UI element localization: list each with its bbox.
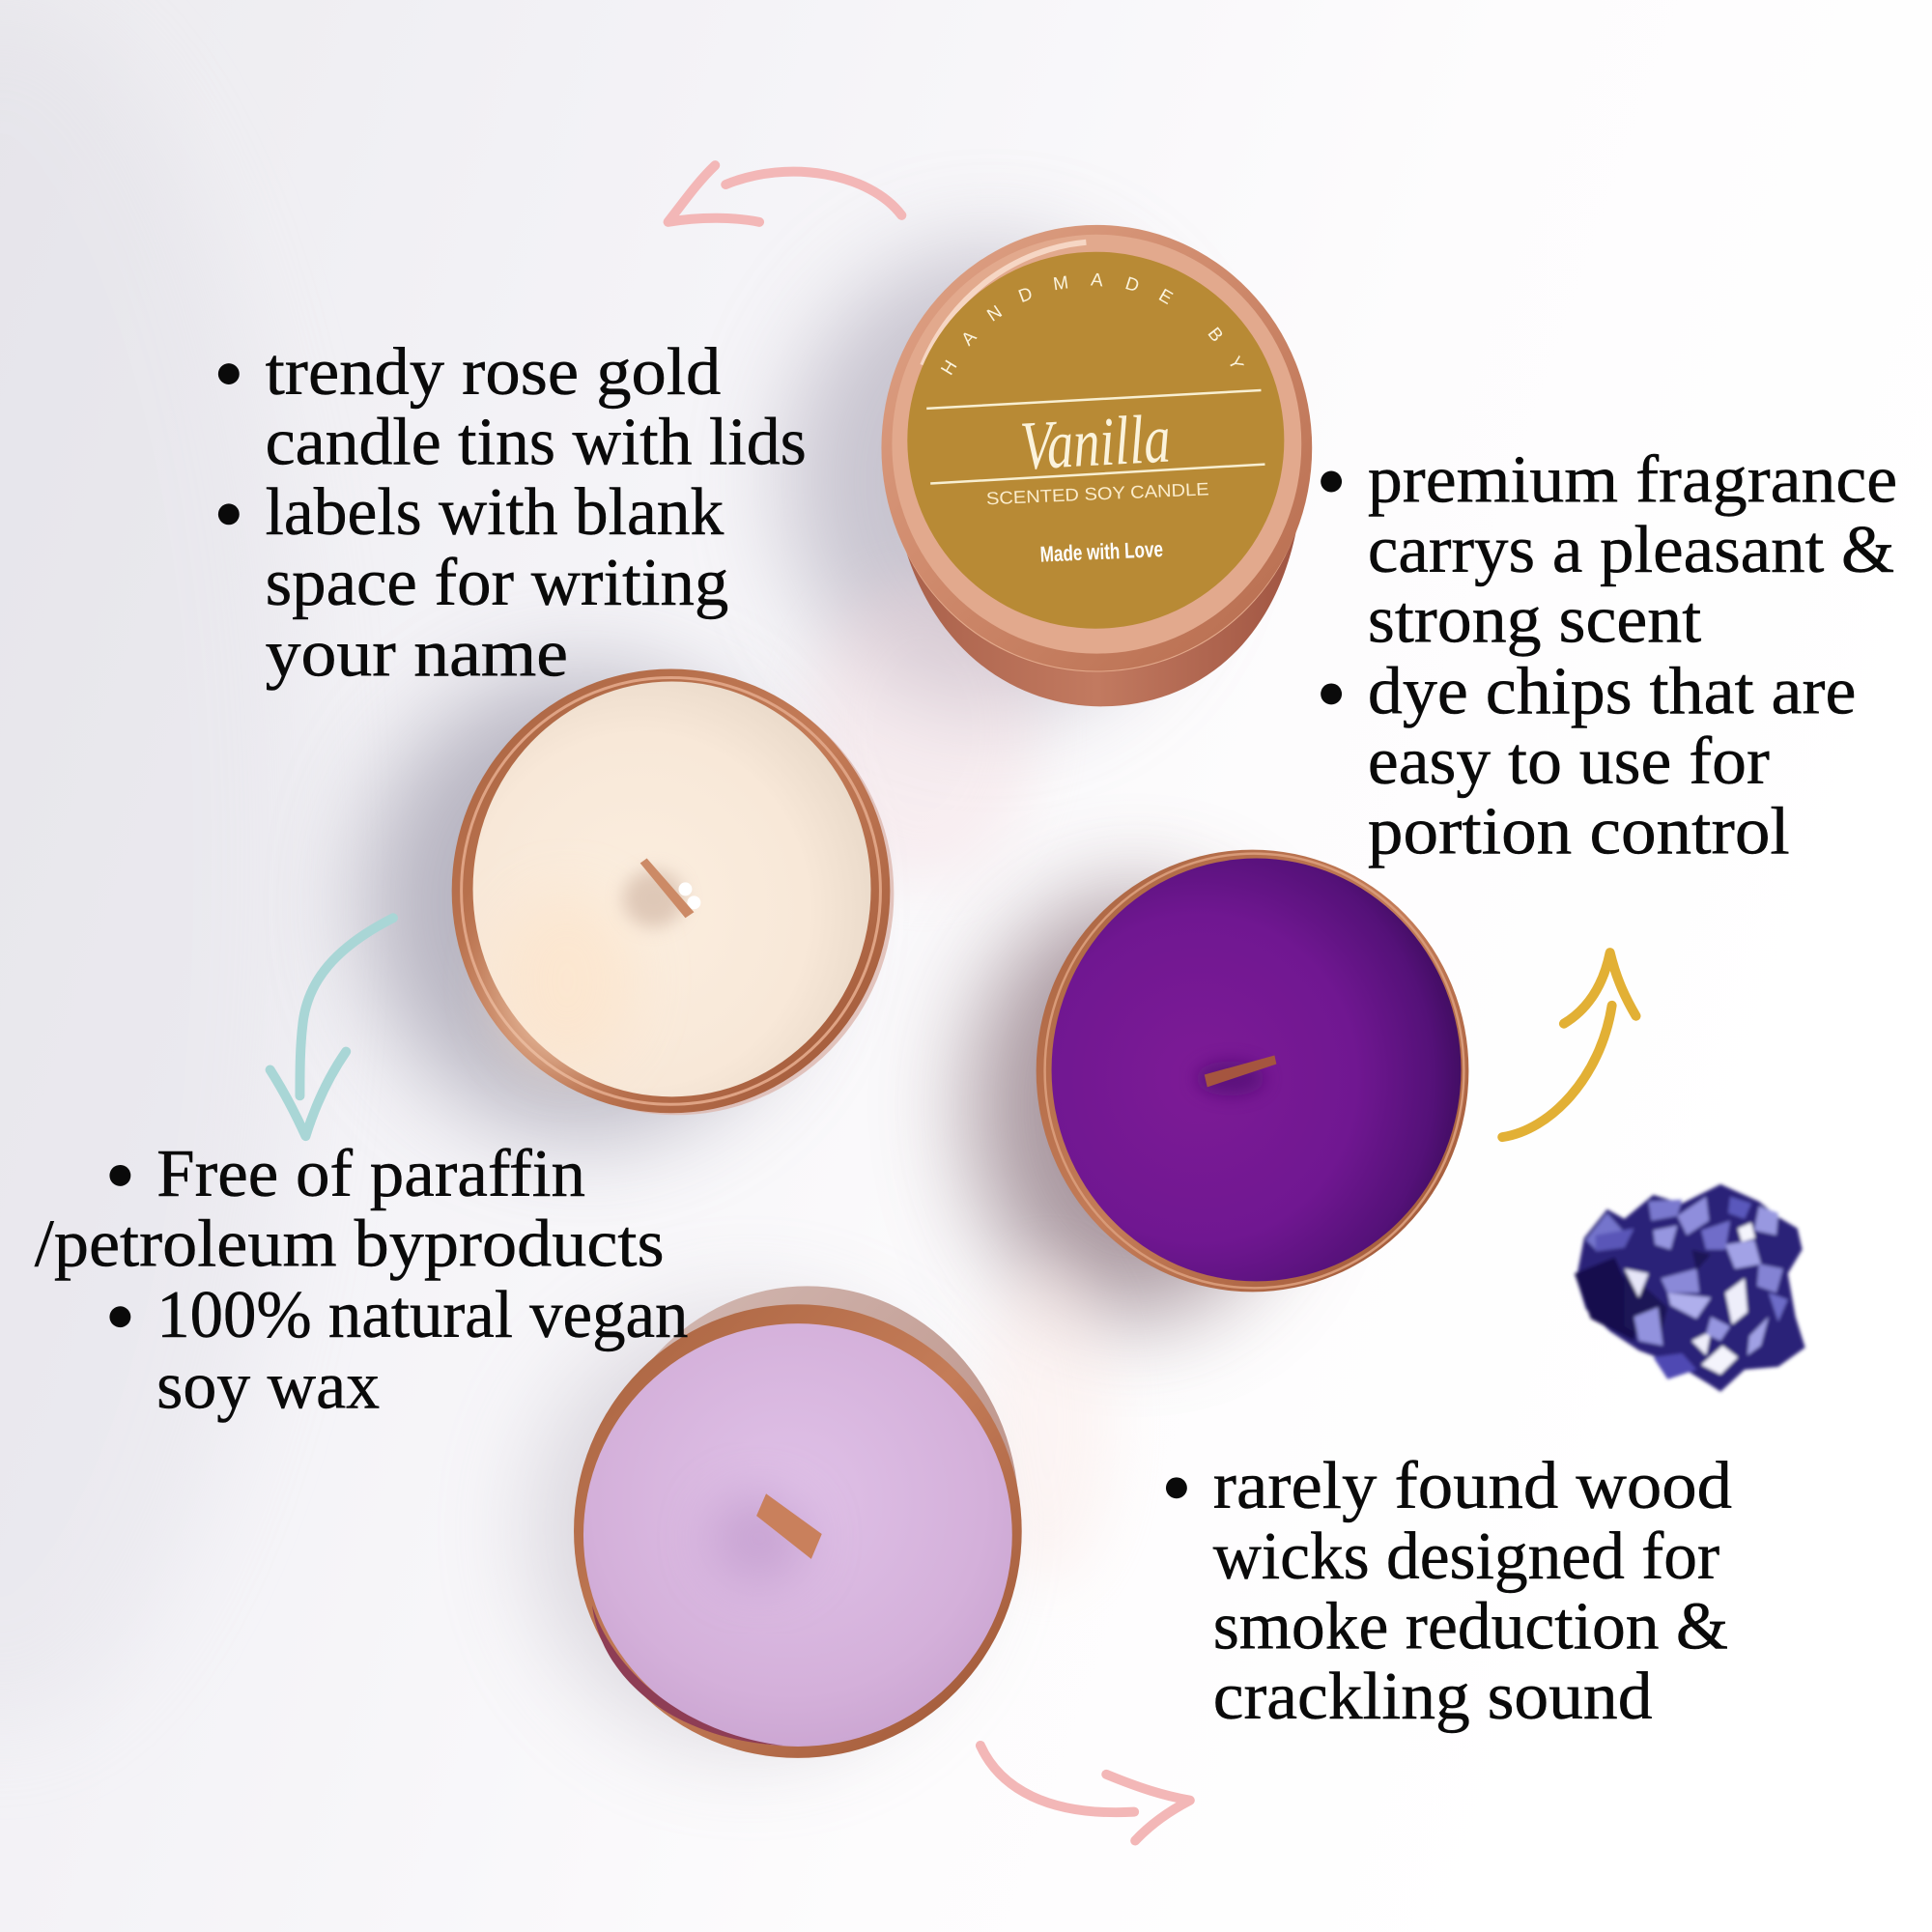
text block: fragrance and dye: premium fragrance <box>1368 442 1897 517</box>
text block: fragrance and dye: strong scent <box>1368 583 1701 658</box>
lid rim <box>881 225 1312 671</box>
text block: rose gold tins: your name <box>266 617 568 692</box>
text block: fragrance and dye: easy to use for <box>1368 724 1770 799</box>
arrow: pink bottom <box>980 1746 1190 1840</box>
bullet <box>218 363 240 384</box>
bullet <box>1321 471 1342 492</box>
text block: paraffin free and soy wax: /petroleum byproducts <box>35 1207 665 1281</box>
text block: wood wicks: wicks designed for <box>1213 1520 1719 1594</box>
soft shadows <box>0 0 1297 1745</box>
tin body <box>895 462 1297 706</box>
gold label <box>907 252 1284 629</box>
text block: wood wicks <box>1166 1449 1732 1734</box>
text block: wood wicks: rarely found wood <box>1213 1449 1732 1523</box>
wood wick <box>623 859 700 927</box>
arrow: yellow right <box>1502 952 1636 1137</box>
label name: Vanilla <box>1018 401 1172 485</box>
bullet <box>218 503 240 525</box>
label footer: Made with Love <box>1039 536 1163 567</box>
text block: paraffin free and soy wax: soy wax <box>156 1350 380 1424</box>
arrow: pink top <box>668 165 901 222</box>
text block: wood wicks: crackling sound <box>1213 1660 1652 1734</box>
candle: purple wax tin <box>1037 850 1468 1292</box>
bullet <box>1166 1477 1187 1498</box>
text block: rose gold tins: candle tins with lids <box>266 406 807 480</box>
text block: rose gold tins <box>218 335 807 692</box>
arrow: teal left <box>270 918 393 1136</box>
text block: wood wicks: smoke reduction & <box>1213 1589 1728 1663</box>
bullet <box>1321 683 1342 704</box>
candle: lidded rose gold tin with label <box>881 224 1312 707</box>
text block: fragrance and dye <box>1321 442 1897 869</box>
label ruled lines <box>926 390 1264 483</box>
candle: cream wax tin <box>452 669 894 1115</box>
wood wick <box>1196 1056 1276 1095</box>
label subtitle: SCENTED SOY CANDLE <box>985 478 1209 508</box>
text block: paraffin free and soy wax <box>35 1137 688 1424</box>
bullet <box>109 1306 130 1327</box>
text block: fragrance and dye: dye chips that are <box>1368 654 1856 728</box>
candle: lilac wax tin <box>574 1286 1022 1758</box>
text block: fragrance and dye: portion control <box>1368 795 1790 869</box>
text block: rose gold tins: trendy rose gold <box>266 335 721 410</box>
text block: fragrance and dye: carrys a pleasant & <box>1368 513 1894 587</box>
wood wick <box>756 1493 822 1559</box>
text block: rose gold tins: space for writing <box>266 546 728 620</box>
text block: paraffin free and soy wax: Free of paraffin <box>156 1137 585 1211</box>
bullet <box>109 1165 130 1186</box>
label arc text: HANDMADE BY <box>941 272 1244 375</box>
text block: rose gold tins: labels with blank <box>266 475 724 550</box>
text block: paraffin free and soy wax: 100% natural vegan <box>156 1278 688 1352</box>
dye chips pile <box>1575 1184 1805 1392</box>
